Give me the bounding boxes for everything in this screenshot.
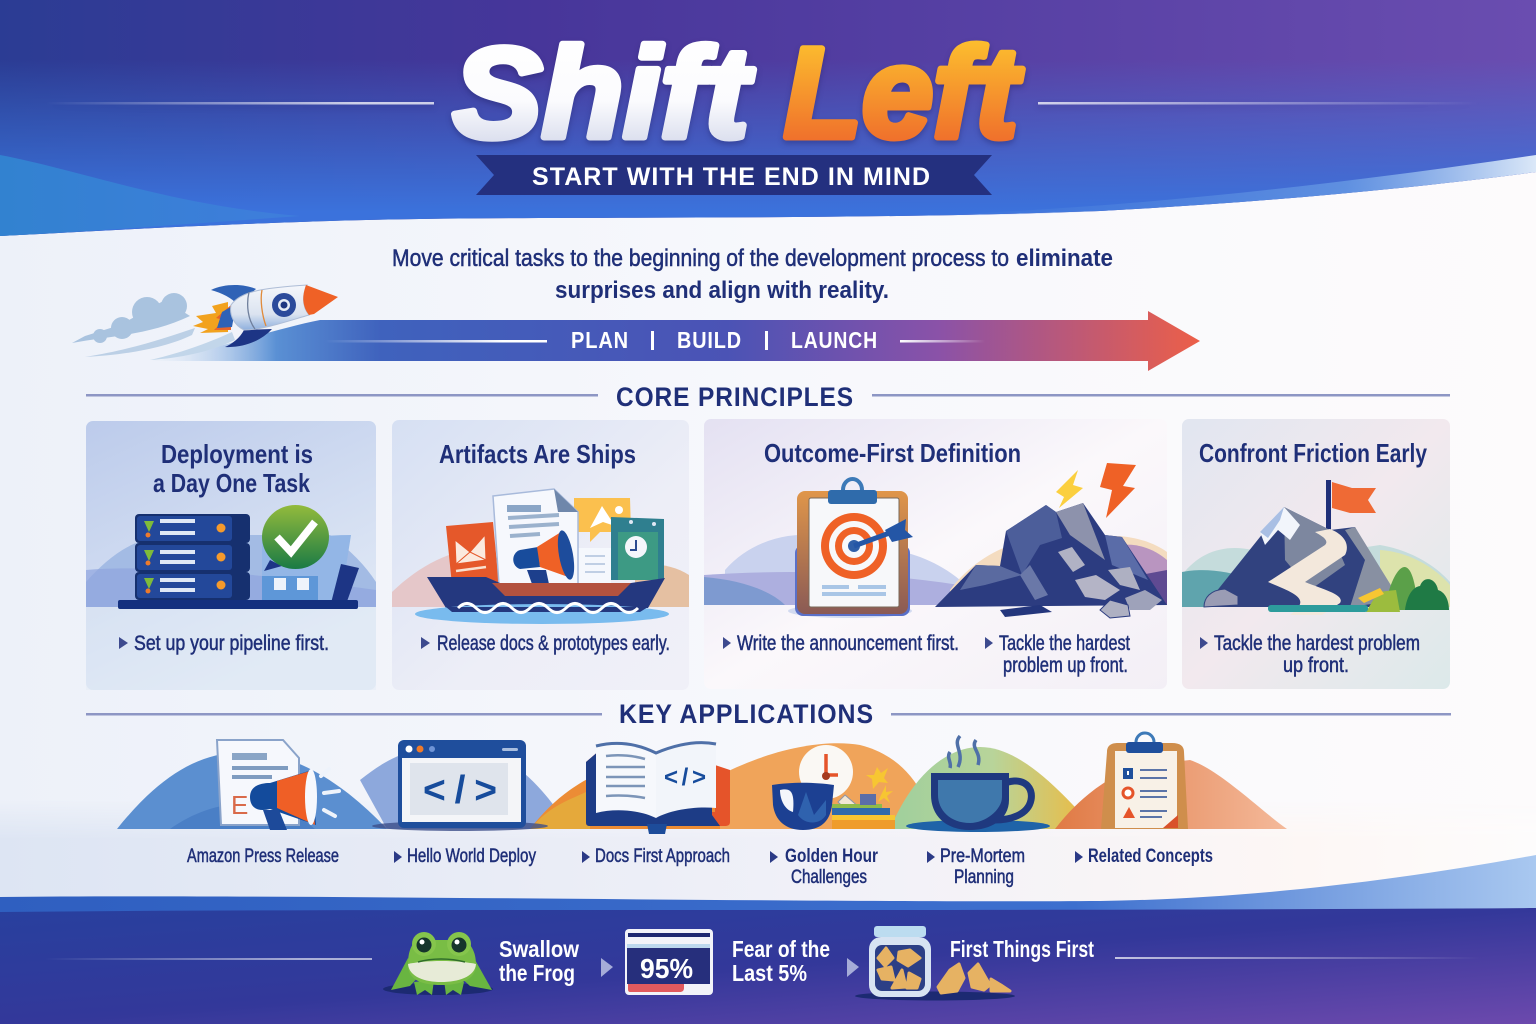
bullet: hardest problem: Tackle the hardest [999,632,1130,655]
text: first things first: First Things First [950,936,1094,962]
header banner [0,0,1536,236]
icon: open book [586,743,730,834]
label: pre-mortem planning: Pre-Mortem [940,846,1025,867]
text: fear of the last 5%: Last 5% [732,960,807,986]
icon: open book: </> [664,764,706,791]
subtitle ribbon [476,155,992,195]
bullet: Release docs & prototypes early. [437,632,670,655]
icon: server stack [118,514,358,609]
bullet [1200,632,1420,677]
hills card 3 [704,535,1167,605]
title: Shift Left [45,22,1480,165]
label: related concepts: Related Concepts [1088,846,1213,867]
labels: key applications [187,846,1213,888]
bullet: up front. [1283,654,1349,677]
icon: press release megaphone [217,740,339,830]
icon: press release megaphone: E [231,790,248,820]
icon: hello world browser [372,740,548,831]
icon: rocky mountain with lightning [935,463,1167,618]
bullet: Set up your pipeline first. [134,632,329,655]
chevron [601,958,613,977]
heading [153,439,313,498]
panel: confront friction early [1182,419,1450,689]
icon: mountain with flag and path [1204,480,1449,615]
bullet: hardest problem [985,632,1130,677]
label: docs first approach: Docs First Approach [595,846,730,867]
text: swallow the frog: the Frog [499,960,575,986]
heading: Confront Friction Early [1199,438,1427,468]
panel: deployment is a day one task [86,421,376,690]
icon: jar of rocks [855,926,1015,1000]
heading: a Day One Task [153,468,310,498]
label: amazon press release: Amazon Press Release [187,846,339,867]
icon: 95% progress window: 95% [640,953,693,984]
heading: Outcome-First Definition [764,438,1021,468]
label: pre-mortem planning [927,846,1025,888]
icon: clipboard with target [788,479,913,618]
intro text: Move critical tasks to the beginning of the development process to [392,245,1009,272]
hills card 2 [392,545,490,607]
footer band [0,855,1536,1024]
process arrow: plan build launch: BUILD [677,327,742,353]
panel: artifacts are ships [392,420,689,690]
hills card 1 [86,535,376,607]
text: swallow the frog [499,936,579,986]
hills behind key applications [117,743,1287,829]
icon: frog [383,932,493,995]
text: swallow the frog: Swallow [499,936,579,962]
icon: hello world browser: </> [423,769,497,812]
text: fear of the last 5%: Fear of the [732,936,830,962]
intro text [392,245,1113,304]
icon: 95% progress window [625,929,713,995]
hills card 4 [1182,545,1450,607]
icon: light building [262,535,359,607]
process arrow: plan build launch: PLAN [571,327,629,353]
icon: rocket [72,285,338,360]
icon: ship with documents [415,489,669,624]
subtitle ribbon: START WITH THE END IN MIND [532,163,930,191]
icon: coffee cup with steam [906,736,1050,832]
panel: outcome-first definition [704,419,1167,689]
text: fear of the last 5% [732,936,830,986]
label: pre-mortem planning: Planning [954,867,1014,888]
bullet: hardest problem: problem up front. [1003,654,1128,677]
heading: key applications: KEY APPLICATIONS [619,699,874,729]
title: Shift Left: Left [784,22,1022,165]
heading: core principles: CORE PRINCIPLES [616,382,854,412]
icon: related concepts clipboard [1101,733,1188,829]
label: golden hour challenges: Golden Hour [785,846,878,867]
icon: green check bubble [262,505,329,571]
intro text: eliminate [1016,245,1113,272]
label: hello world deploy: Hello World Deploy [407,846,536,867]
process arrow: plan build launch [150,311,1200,371]
title: Shift Left: Shift [453,22,754,165]
bullet: announcement: Write the announcement first. [737,632,959,655]
label: golden hour challenges [770,846,878,888]
bullet: Tackle the hardest problem [1214,632,1420,655]
key applications tint [0,820,776,900]
heading: Artifacts Are Ships [439,439,636,469]
label: golden hour challenges: Challenges [791,867,867,888]
intro text: surprises and align with reality. [555,277,889,304]
icon: clock books and cup [772,745,895,830]
process arrow: plan build launch: LAUNCH [791,327,878,353]
chevron [847,958,859,977]
heading: Deployment is [161,439,313,469]
